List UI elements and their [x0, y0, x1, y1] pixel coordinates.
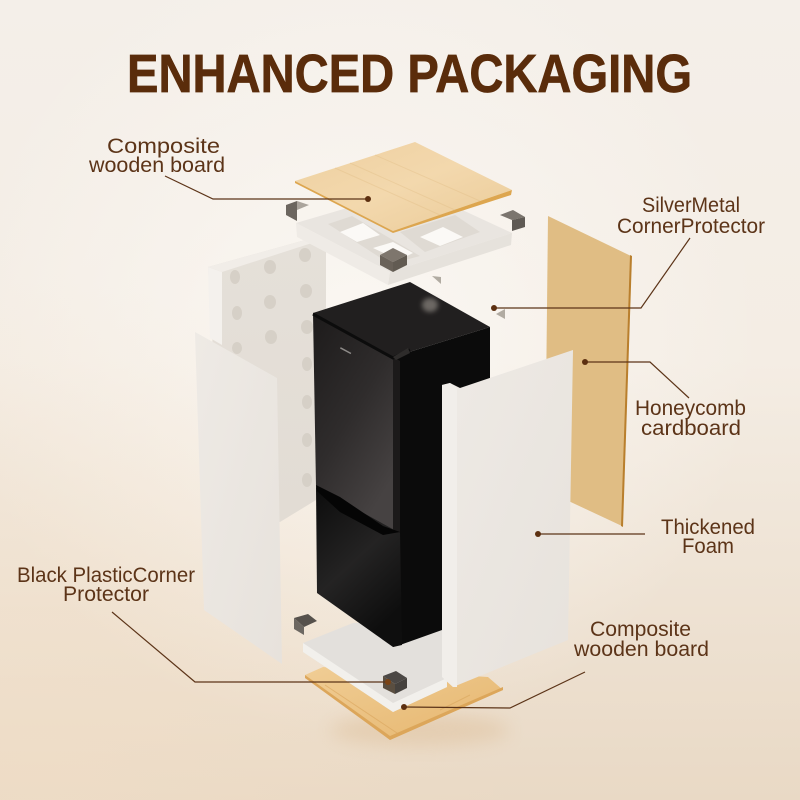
fridge right side [393, 327, 490, 647]
callout: thickened foam: Foam [682, 535, 734, 558]
title: ENHANCED PACKAGING [127, 44, 692, 104]
callout: honeycomb cardboard [582, 359, 746, 440]
icon: top front corner protector [380, 248, 407, 272]
panel: rear foam with dimples [208, 240, 326, 522]
callout: silver metal corner protector [491, 194, 765, 311]
fridge hinge [393, 348, 410, 360]
fridge top [313, 282, 490, 357]
panel: front right foam [442, 350, 573, 687]
callout: thickened foam: Thickened [661, 516, 755, 539]
panel: bottom foam board [303, 620, 447, 712]
callout: black plastic corner protector: Black PlasticCorner [17, 564, 195, 587]
callout: bottom composite wooden board [401, 618, 709, 710]
panel: top foam frame [296, 188, 512, 285]
panel: front left foam [195, 332, 282, 664]
fridge front top edge [313, 314, 410, 358]
fridge handle gap [316, 485, 400, 535]
fridge [313, 282, 490, 647]
callout: silver metal corner protector: CornerProtector [617, 215, 765, 238]
callout: top composite wooden board: wooden board [88, 154, 225, 177]
callout: honeycomb cardboard: cardboard [641, 417, 741, 440]
fridge upper door [313, 313, 393, 531]
callout: top composite wooden board [88, 135, 371, 202]
callout: top composite wooden board: Composite [107, 135, 220, 158]
callout: honeycomb cardboard: Honeycomb [635, 397, 746, 420]
icon: top right corner protector [500, 210, 525, 231]
fridge logo [340, 347, 351, 354]
icon: metal corner protector left [432, 276, 441, 284]
callout: black plastic corner protector: Protector [63, 583, 149, 606]
callout: bottom composite wooden board: Composite [590, 618, 691, 641]
callout: silver metal corner protector: SilverMetal [642, 194, 740, 217]
callout: black plastic corner protector [17, 564, 391, 685]
icon: bottom back corner protector [294, 614, 317, 635]
fridge upper door edge [393, 357, 400, 533]
icon: metal corner protector right [496, 309, 505, 319]
fridge lower door [316, 487, 402, 647]
panel: top wooden board [295, 142, 512, 233]
icon: bottom front corner protector [383, 671, 407, 694]
callout: bottom composite wooden board: wooden board [573, 638, 709, 661]
callout: thickened foam [535, 516, 755, 558]
icon: top left corner protector [286, 201, 309, 221]
panel: honeycomb cardboard [545, 216, 632, 527]
panel: bottom wooden board [305, 667, 510, 746]
